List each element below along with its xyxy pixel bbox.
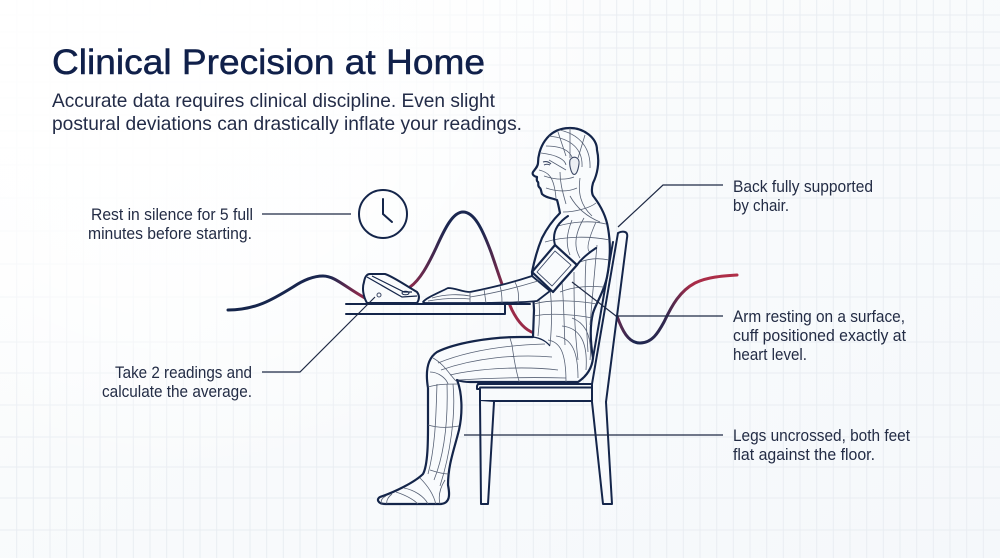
table <box>346 304 530 314</box>
callout: arm and cuff: cuff positioned exactly at <box>733 326 906 345</box>
chair <box>477 232 627 504</box>
eye <box>543 162 551 165</box>
blood pressure cuff <box>532 245 577 292</box>
callout: back supported: Back fully supported <box>733 177 873 196</box>
callout: arm and cuff: Arm resting on a surface, <box>733 307 905 326</box>
chair backrest slat <box>593 242 613 358</box>
callout: arm and cuff: heart level. <box>733 345 807 364</box>
callout: rest in silence: minutes before starting. <box>88 224 252 243</box>
callout: legs uncrossed: Legs uncrossed, both feet <box>733 426 910 445</box>
icon: clock <box>359 190 407 238</box>
subtitle: Accurate data requires clinical discipline. Even slight <box>52 90 496 112</box>
seated human mesh figure <box>378 128 610 505</box>
callout: back supported <box>618 177 873 227</box>
callout: take 2 readings: Take 2 readings and <box>115 363 252 382</box>
subtitle: postural deviations can drastically inflate your readings. <box>52 113 522 135</box>
callout: back supported: by chair. <box>733 196 789 215</box>
hip crease <box>533 337 550 346</box>
title: Clinical Precision at Home <box>52 43 485 82</box>
chair front leg <box>480 401 494 504</box>
callout: arm and cuff <box>572 282 906 364</box>
subtitle <box>52 90 522 135</box>
callout: legs uncrossed <box>464 426 910 464</box>
upper arm outline <box>554 216 596 265</box>
callout: take 2 readings <box>102 297 375 401</box>
mesh lines <box>381 128 610 505</box>
ear <box>570 157 579 174</box>
chair rear leg <box>592 402 612 504</box>
body outline <box>378 128 610 504</box>
blood pressure wave <box>228 212 737 343</box>
callout: legs uncrossed: flat against the floor. <box>733 445 875 464</box>
chair back post <box>592 232 627 402</box>
chair seat <box>477 384 592 401</box>
callout: rest in silence: Rest in silence for 5 full <box>91 205 253 224</box>
callout: rest in silence <box>88 205 351 243</box>
blood pressure monitor <box>363 274 419 303</box>
forearm and hand <box>423 276 550 303</box>
callout: take 2 readings: calculate the average. <box>102 382 252 401</box>
